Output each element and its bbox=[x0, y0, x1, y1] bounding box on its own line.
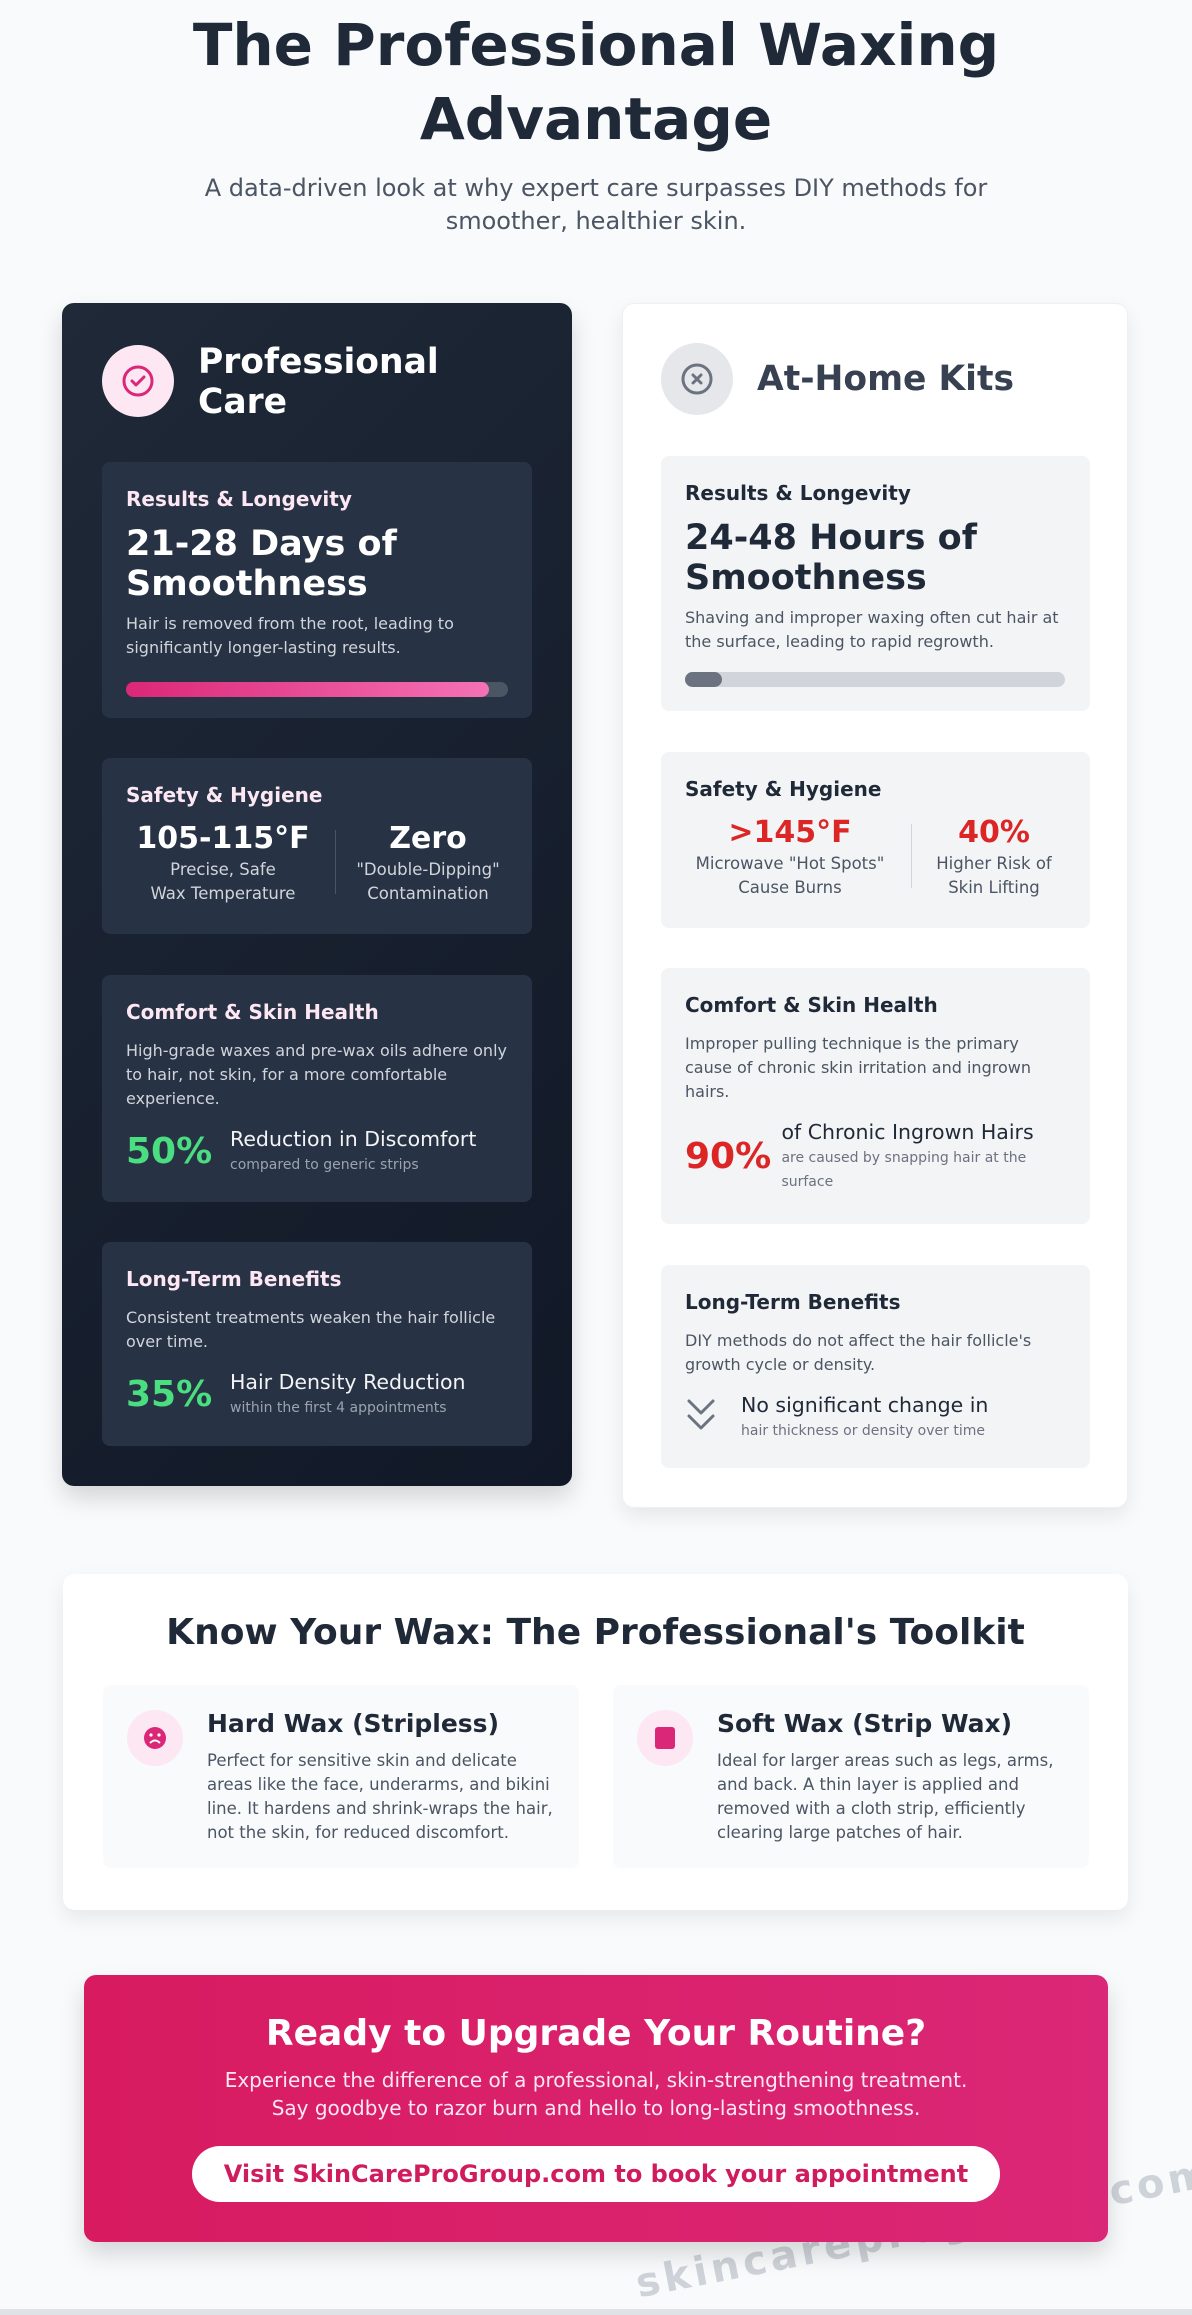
box: results bbox=[661, 456, 1090, 711]
box: safety: Cause Burns bbox=[738, 878, 842, 897]
stat: 35%: Hair Density Reduction bbox=[230, 1370, 466, 1394]
box: safety: Precise, Safe bbox=[170, 860, 276, 879]
box: safety: Microwave "Hot Spots" bbox=[696, 854, 884, 873]
box: comfort: Comfort & Skin Health bbox=[685, 993, 938, 1017]
icon: soft wax bbox=[637, 1710, 693, 1766]
box: long-term: Long-Term Benefits bbox=[685, 1290, 901, 1314]
icon: hard wax bbox=[127, 1710, 183, 1766]
box: safety bbox=[661, 752, 1090, 928]
icon: double chevron bbox=[687, 1399, 714, 1430]
heading: at-home kits: At-Home Kits bbox=[757, 359, 1014, 399]
box: long-term bbox=[661, 1265, 1090, 1468]
stat: 90%: 90% bbox=[685, 1136, 771, 1176]
icon: check circle bbox=[102, 345, 174, 417]
heading: professional care: Care bbox=[198, 382, 287, 422]
progress bar bbox=[126, 682, 508, 697]
heading: toolkit: Know Your Wax: The Professional's Toolkit bbox=[166, 1612, 1025, 1653]
panel: at-home kits bbox=[622, 303, 1128, 1508]
box: safety: Higher Risk of bbox=[936, 854, 1052, 873]
box: comfort: High-grade waxes and pre-wax oils adhere only to hair, not skin, for a more comfortable experience. bbox=[126, 1041, 507, 1108]
box: results: Results & Longevity bbox=[685, 481, 911, 505]
button: Visit SkinCareProGroup.com to book your appointment bbox=[224, 2160, 968, 2188]
stat: 90%: are caused by snapping hair at the surface bbox=[781, 1150, 1026, 1190]
box: results: Shaving and improper waxing often cut hair at the surface, leading to rapid regrowth. bbox=[685, 608, 1059, 651]
box: safety: Safety & Hygiene bbox=[126, 783, 322, 807]
box: results: Hair is removed from the root, leading to significantly longer-lasting results. bbox=[126, 614, 454, 657]
card: soft wax: Ideal for larger areas such as legs, arms, and back. A thin layer is applied and removed with a cloth strip, efficiently clearing large patches of hair. bbox=[717, 1751, 1053, 1842]
box: safety: Zero bbox=[389, 821, 467, 856]
text: cta body bbox=[225, 2068, 967, 2120]
box: results bbox=[102, 462, 532, 718]
heading: professional care: Professional bbox=[198, 342, 439, 382]
button bbox=[192, 2146, 1000, 2202]
stat: no change bbox=[687, 1393, 988, 1439]
title: Advantage bbox=[420, 85, 772, 153]
box: safety bbox=[102, 758, 532, 934]
title bbox=[193, 11, 999, 153]
box: comfort bbox=[661, 968, 1090, 1224]
text: cta body: Say goodbye to razor burn and hello to long-lasting smoothness. bbox=[272, 2096, 920, 2120]
stat: no change: No significant change in bbox=[741, 1393, 988, 1417]
text: cta body: Experience the difference of a professional, skin-strengthening treatment. bbox=[225, 2068, 967, 2092]
box: results: 24-48 Hours of Smoothness bbox=[685, 518, 977, 598]
box: safety: 40% bbox=[958, 815, 1030, 850]
stat: 50%: compared to generic strips bbox=[230, 1157, 419, 1173]
box: comfort: Comfort & Skin Health bbox=[126, 1000, 379, 1024]
heading: cta: Ready to Upgrade Your Routine? bbox=[266, 2013, 926, 2054]
panel: toolkit bbox=[63, 1574, 1128, 1910]
stat: 35% bbox=[126, 1370, 466, 1416]
box: safety: Contamination bbox=[367, 884, 489, 903]
heading: professional care bbox=[198, 342, 439, 422]
stat: 35%: within the first 4 appointments bbox=[230, 1400, 447, 1416]
box: safety: Safety & Hygiene bbox=[685, 777, 881, 801]
stat: 90% bbox=[685, 1120, 1034, 1190]
stat: 50% bbox=[126, 1127, 476, 1173]
panel: call to action bbox=[84, 1975, 1108, 2242]
subtitle: A data-driven look at why expert care surpasses DIY methods for smoother, healthier skin. bbox=[205, 174, 987, 235]
card: hard wax bbox=[103, 1685, 579, 1868]
stat: 50%: 50% bbox=[126, 1130, 212, 1172]
box: results: 21-28 Days of Smoothness bbox=[126, 524, 397, 604]
box: safety: Wax Temperature bbox=[151, 884, 295, 903]
stat: no change: hair thickness or density over time bbox=[741, 1423, 985, 1439]
card: soft wax bbox=[613, 1685, 1089, 1868]
box: safety: Skin Lifting bbox=[948, 878, 1040, 897]
box: safety: >145°F bbox=[728, 815, 852, 850]
box: comfort: Improper pulling technique is the primary cause of chronic skin irritation and ingrown hairs. bbox=[685, 1034, 1031, 1101]
stat: 35%: 35% bbox=[126, 1374, 212, 1414]
card: soft wax: Soft Wax (Strip Wax) bbox=[717, 1709, 1012, 1738]
box: results: Results & Longevity bbox=[126, 487, 352, 511]
box: long-term bbox=[102, 1242, 532, 1446]
title: The Professional Waxing bbox=[193, 11, 999, 79]
box: long-term: DIY methods do not affect the hair follicle's growth cycle or density. bbox=[685, 1331, 1031, 1374]
box: safety: "Double-Dipping" bbox=[356, 860, 500, 879]
stat: 90%: of Chronic Ingrown Hairs bbox=[781, 1120, 1034, 1144]
card: hard wax: Hard Wax (Stripless) bbox=[207, 1709, 499, 1738]
box: long-term: Long-Term Benefits bbox=[126, 1267, 342, 1291]
progress bar bbox=[685, 672, 1065, 687]
stat: 50%: Reduction in Discomfort bbox=[230, 1127, 476, 1151]
box: comfort bbox=[102, 975, 532, 1202]
panel: professional care bbox=[62, 303, 572, 1486]
card: hard wax: Perfect for sensitive skin and delicate areas like the face, underarms, and bikini line. It hardens and shrink-wraps the hair, not the skin, for reduced discomfort. bbox=[207, 1751, 553, 1842]
icon: x circle bbox=[661, 343, 733, 415]
box: safety: 105-115°F bbox=[136, 821, 310, 856]
box: long-term: Consistent treatments weaken the hair follicle over time. bbox=[126, 1308, 495, 1351]
